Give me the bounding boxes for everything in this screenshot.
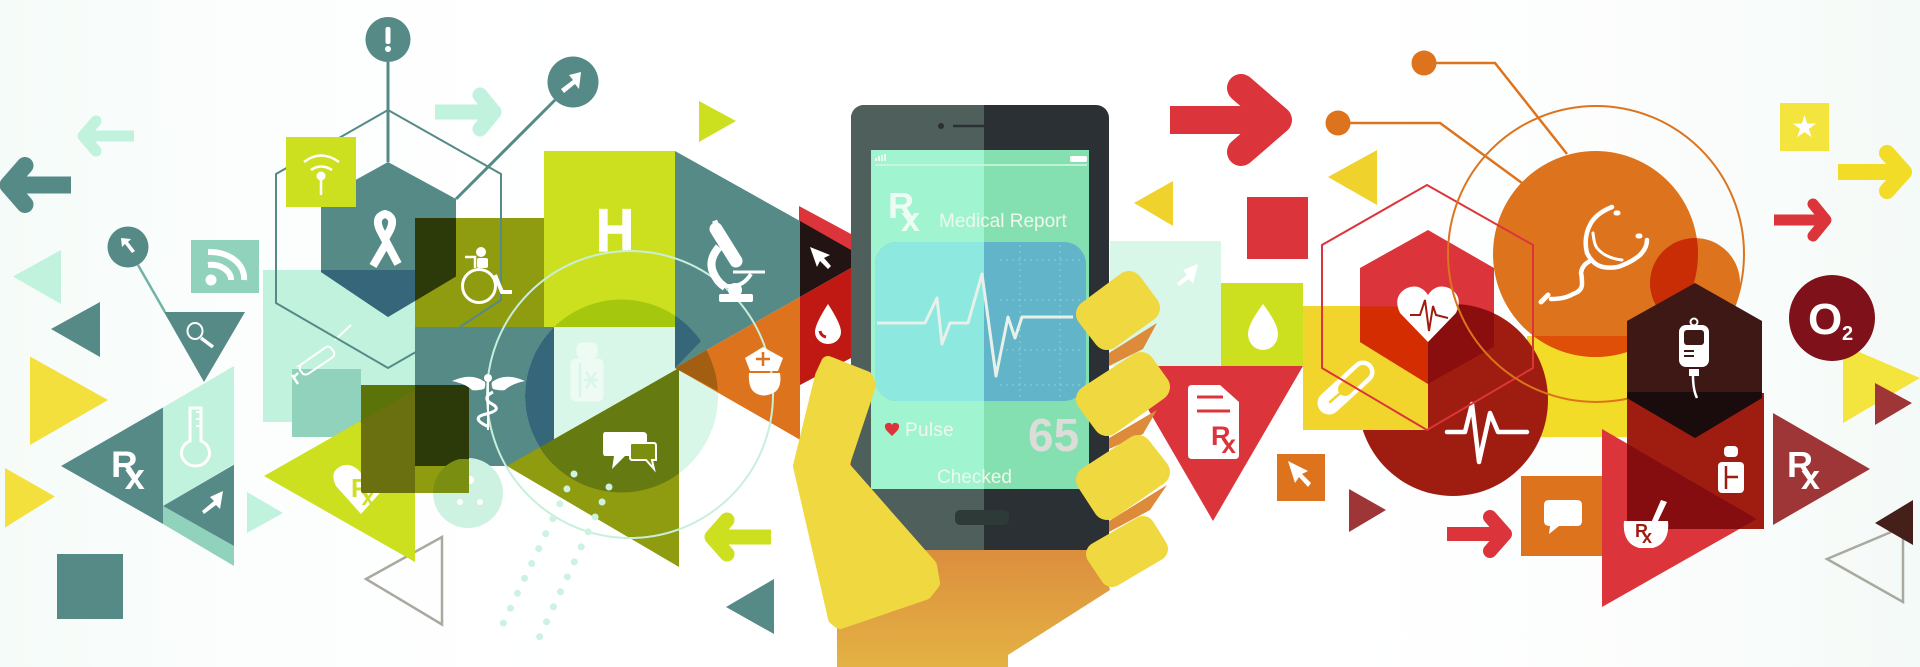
arrow: red lower xyxy=(1447,517,1505,551)
arrow: small red xyxy=(1774,204,1826,236)
icon: heart with pulse xyxy=(1397,287,1459,342)
triangle: lime with heart: R xyxy=(351,473,370,503)
tile: star xyxy=(1780,103,1829,151)
teal hexagon with ribbon xyxy=(321,162,456,317)
arrow: mint left xyxy=(83,121,134,151)
circle: O2: O xyxy=(1808,295,1842,344)
hexagon: red heart with yellow tile xyxy=(1303,230,1494,430)
finger 2 xyxy=(1090,366,1156,422)
icon: caduceus xyxy=(452,374,525,430)
triangle: red document xyxy=(1123,366,1303,521)
triangle: Rx teal: x xyxy=(125,456,145,497)
home button xyxy=(955,510,1009,525)
icon: arrow circle xyxy=(548,56,598,108)
screen xyxy=(871,150,1089,489)
icon: pill xyxy=(1329,372,1363,403)
teal panel xyxy=(415,327,554,466)
triangle: yellow upper xyxy=(1328,150,1377,205)
circle: O2: 2 xyxy=(1842,323,1853,345)
orange circle cluster xyxy=(1303,50,1764,607)
text: Checked: Checked xyxy=(937,467,1012,488)
yellow rect lower xyxy=(1527,336,1627,437)
arrow: lime left xyxy=(712,520,771,554)
speaker xyxy=(938,123,1008,129)
right shapes behind hand xyxy=(1110,88,1386,532)
arrow: yellow xyxy=(1838,153,1904,191)
icon: heart xyxy=(885,423,899,436)
triangle: red mortar: R xyxy=(1635,521,1648,541)
outlines xyxy=(1322,106,1744,430)
triangle: grey outline xyxy=(366,537,442,624)
rect: dark red bottle xyxy=(1627,393,1764,529)
tile: orange chat xyxy=(1521,476,1602,556)
text: Rx: x xyxy=(901,201,920,239)
triangle: teal bottom xyxy=(726,579,774,634)
band: red drop xyxy=(800,268,851,385)
hexagon cluster xyxy=(263,17,598,562)
triangle: grey outline xyxy=(1827,527,1903,602)
circle: small orange xyxy=(1650,238,1740,305)
icon: magnifier triangle xyxy=(164,312,245,382)
triangle: Rx maroon: x xyxy=(1801,459,1820,497)
small mint circle xyxy=(433,458,503,528)
ECG panel xyxy=(875,242,1086,401)
thin circle xyxy=(487,251,773,538)
circle: O2 xyxy=(1789,275,1875,361)
thermometer panel xyxy=(163,366,234,506)
thumb xyxy=(800,363,933,622)
triangle: red mortar xyxy=(1602,429,1757,607)
far-right shapes xyxy=(1773,103,1920,602)
triangle: dark brown xyxy=(1875,500,1913,545)
icon: alert circle xyxy=(366,17,410,62)
band: black cursor xyxy=(800,221,851,297)
icon: microscope xyxy=(711,222,765,302)
triangle: Rx teal xyxy=(61,408,163,524)
phone xyxy=(851,105,1109,550)
icon: wifi tile xyxy=(286,137,356,207)
dotted lines xyxy=(503,474,609,638)
triangle: Rx maroon xyxy=(1773,413,1870,525)
square: red xyxy=(1247,197,1308,259)
tile: star: ★ xyxy=(1791,110,1818,145)
triangle: small yellow xyxy=(5,468,55,528)
triangle: maroon small xyxy=(1875,383,1912,425)
triangle: yellow xyxy=(1134,181,1173,226)
tile: lime H: H xyxy=(596,197,634,264)
finger 4 xyxy=(1098,528,1156,575)
text: Rx: R xyxy=(888,185,914,226)
triangle: small mint xyxy=(247,492,283,533)
tile: lime drop xyxy=(1221,283,1303,366)
icon: cursor circle with connector xyxy=(108,226,165,312)
triangle: mint xyxy=(13,250,61,304)
icon: chat bubbles xyxy=(603,432,656,469)
hand xyxy=(800,285,1167,622)
triangle: red document: R xyxy=(1211,421,1230,451)
outline hexagon with connector lines xyxy=(276,62,555,368)
panel: mint square with syringe xyxy=(263,270,415,437)
triangle: arrow teal xyxy=(163,465,234,566)
orange sliver xyxy=(845,440,851,470)
circle: dark red xyxy=(1358,304,1548,496)
triangle: olive chat xyxy=(507,368,679,567)
tile: orange cursor xyxy=(1277,454,1325,501)
triangle: Rx teal: R xyxy=(111,444,138,485)
band: red top xyxy=(799,206,851,251)
tile: mint arrow xyxy=(1110,241,1221,366)
icon: bottle xyxy=(572,344,602,400)
triangle: Rx maroon: R xyxy=(1787,444,1813,485)
triangle: teal xyxy=(51,302,100,357)
ellipse overlap colours xyxy=(525,300,718,492)
arrow: teal left xyxy=(8,166,71,204)
triangle: maroon xyxy=(1349,489,1386,532)
text: Pulse: Pulse xyxy=(905,420,954,441)
band: teal microscope xyxy=(675,151,800,368)
ECG line xyxy=(877,274,1073,376)
tile: bottle xyxy=(554,327,679,452)
central diagonal band xyxy=(435,95,851,638)
hexagon: dark IV bag xyxy=(1627,283,1762,438)
finger 3 xyxy=(1090,449,1156,506)
icon: nurse cap xyxy=(745,347,783,396)
tile: lime H xyxy=(544,151,675,327)
palm xyxy=(837,550,1110,667)
finger 1 xyxy=(1090,285,1146,336)
finger shadows xyxy=(1109,323,1167,532)
arrow: red big xyxy=(1170,88,1278,152)
square: teal xyxy=(57,554,123,619)
icon: pulse line xyxy=(1447,404,1527,462)
triangle: small lime xyxy=(699,101,736,142)
text: Medical Report: Medical Report xyxy=(939,211,1067,232)
left floating shapes xyxy=(5,121,442,624)
arrow: mint right xyxy=(435,95,494,129)
text: 65: 65 xyxy=(1028,409,1079,461)
circle: orange stethoscope xyxy=(1493,151,1698,361)
icon: RSS tile xyxy=(191,240,259,293)
base ellipse xyxy=(525,300,718,492)
triangle: yellow xyxy=(1843,345,1920,423)
band: orange nurse xyxy=(675,297,800,440)
olive panel with wheelchair xyxy=(415,218,544,327)
triangle: lime with heart xyxy=(264,420,415,562)
triangle: red document: x xyxy=(1222,429,1236,459)
triangle: yellow xyxy=(30,356,108,445)
phone body xyxy=(851,105,1109,550)
connector lines xyxy=(1326,50,1567,183)
triangle: red mortar: x xyxy=(1642,527,1652,547)
dark overlap squares xyxy=(361,385,469,493)
status bar xyxy=(875,154,1087,165)
triangle: lime with heart: x xyxy=(362,485,375,510)
